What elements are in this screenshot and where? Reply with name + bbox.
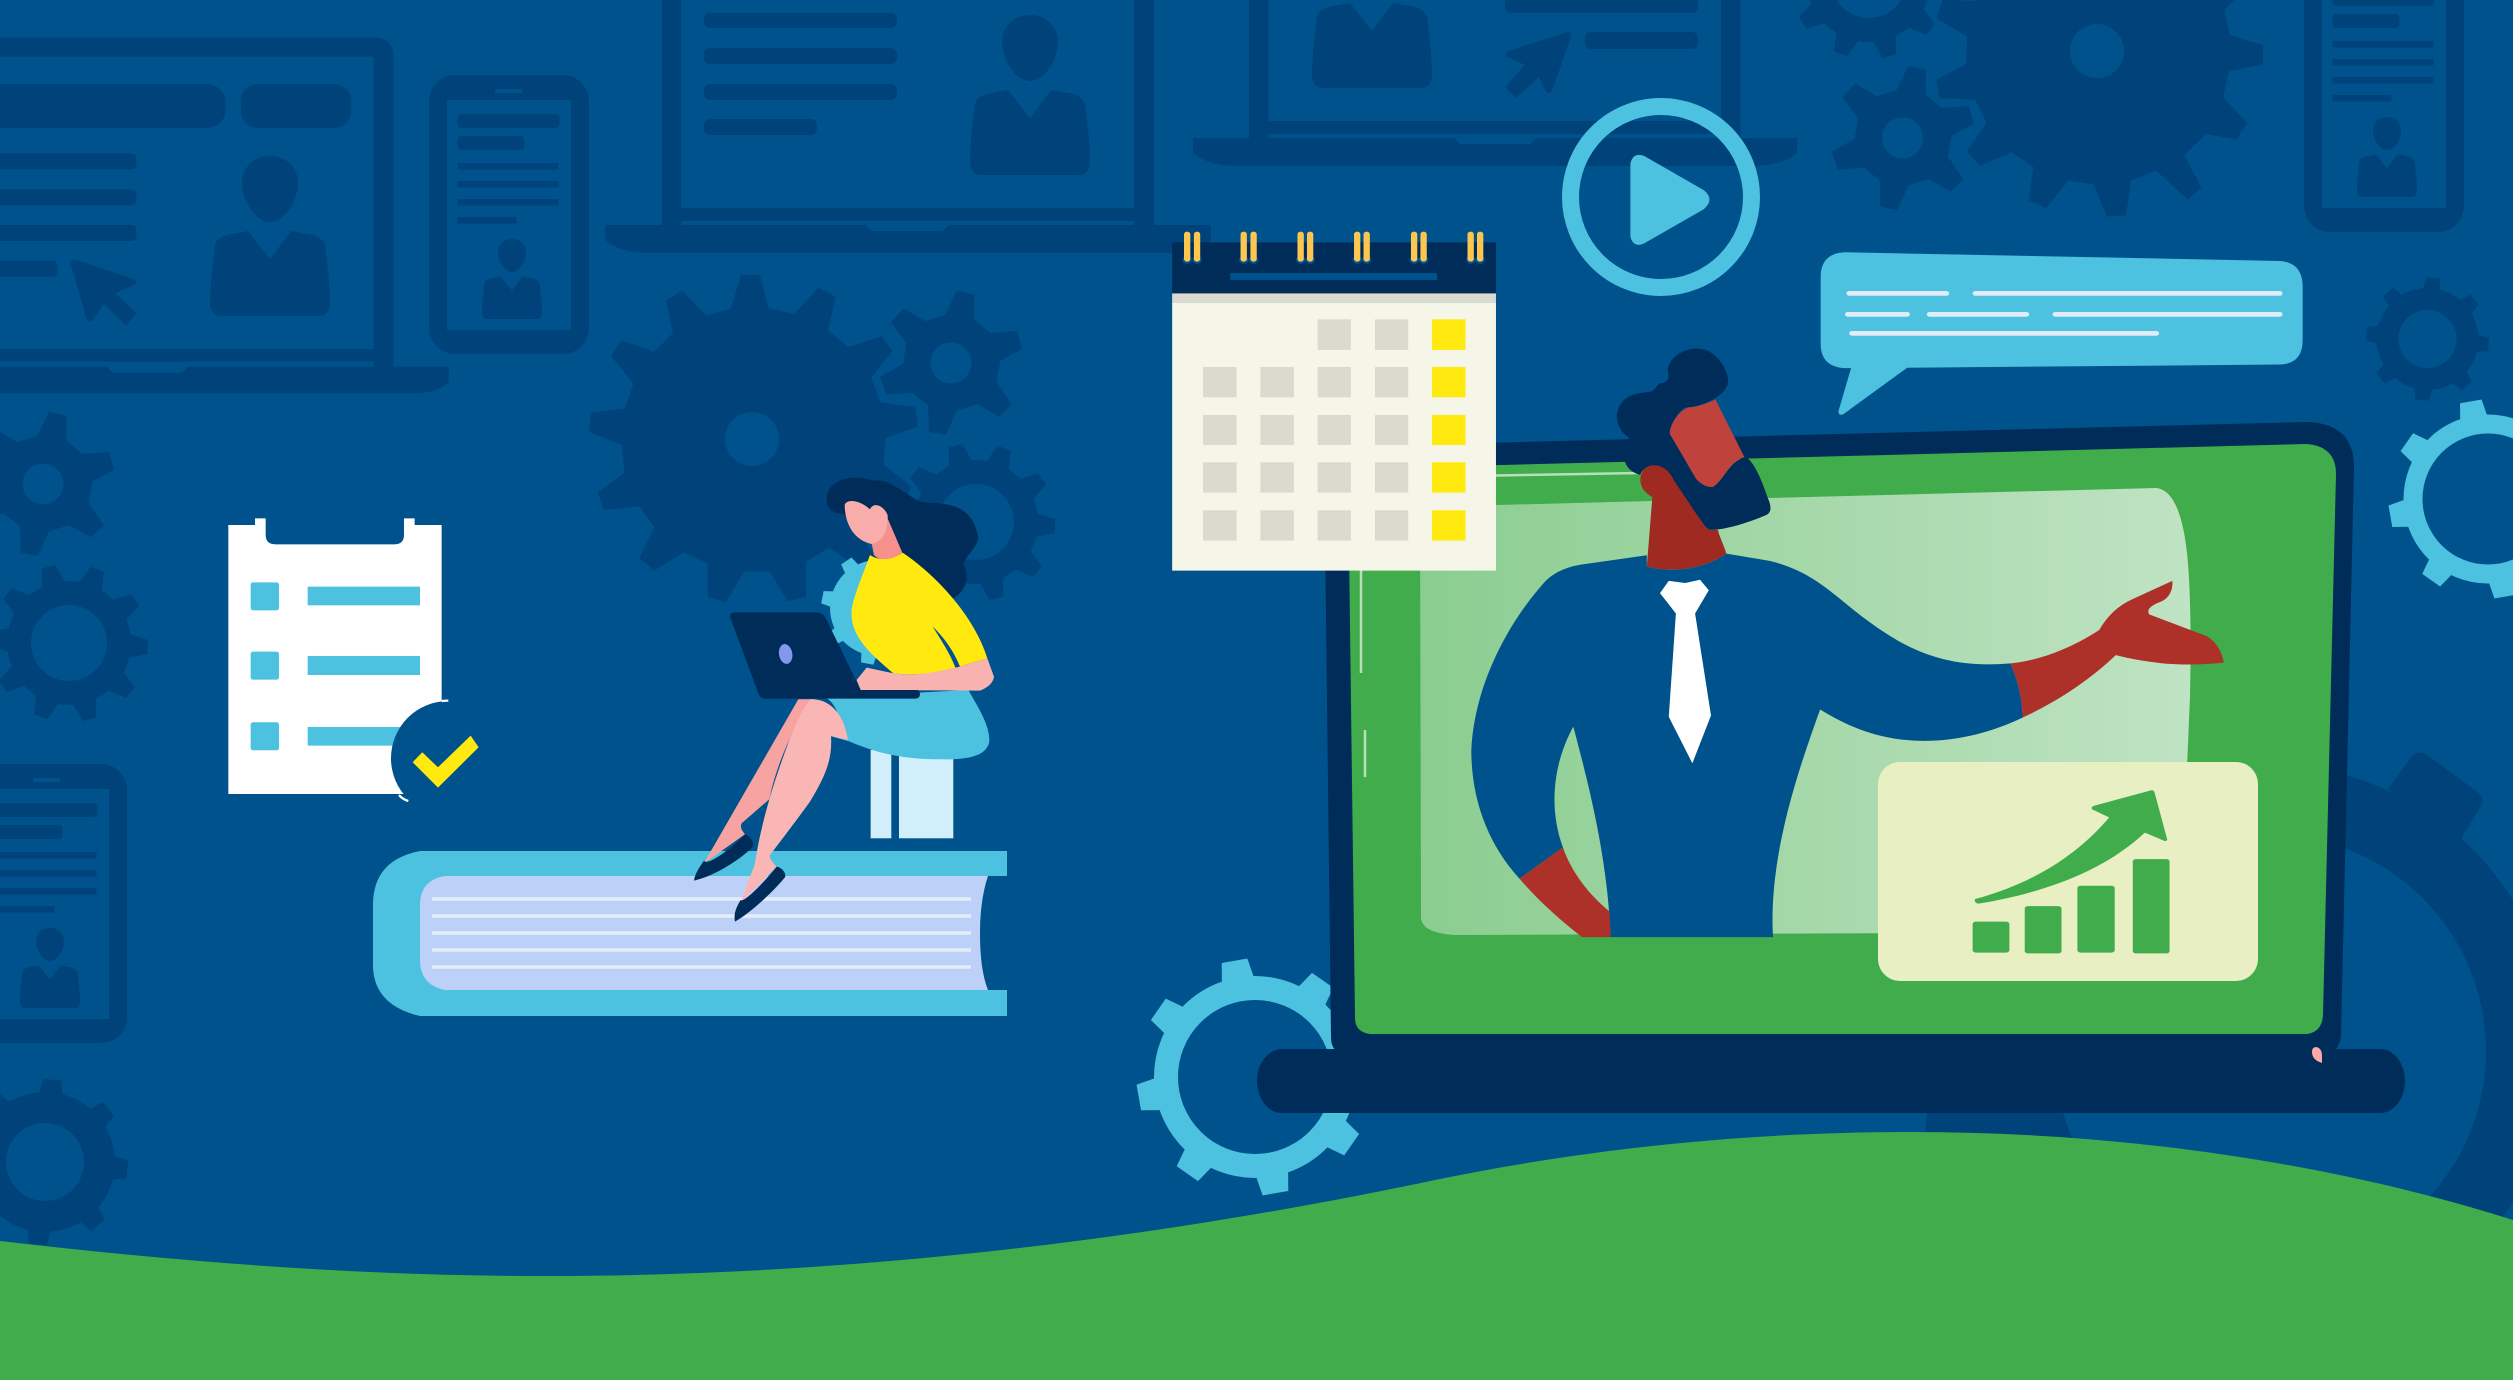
green wave xyxy=(0,1132,2513,1380)
hair xyxy=(827,478,978,598)
back leg xyxy=(700,699,813,870)
clipboard with check xyxy=(228,518,506,816)
background: laptop centre xyxy=(606,0,1211,253)
calendar highlighted cells xyxy=(1432,319,1466,541)
shoes xyxy=(735,867,785,922)
neck xyxy=(1640,465,1726,570)
neck xyxy=(872,518,902,560)
large laptop xyxy=(1257,422,2405,1113)
hair xyxy=(1617,349,1770,530)
background: phone right xyxy=(2304,0,2464,232)
front leg xyxy=(742,699,848,902)
laptop base xyxy=(1257,1049,2405,1113)
calendar day cells xyxy=(1203,319,1408,541)
calendar rings xyxy=(1182,232,1485,264)
background: phone left top xyxy=(429,75,589,354)
chart card xyxy=(1878,762,2258,981)
background: large gear behind laptop xyxy=(1924,752,2513,1302)
left arm xyxy=(1520,847,1611,937)
laptop xyxy=(730,612,920,699)
face xyxy=(845,501,888,544)
calendar xyxy=(1172,232,1496,571)
message lines xyxy=(1848,293,2280,333)
calendar header xyxy=(1172,242,1496,293)
shirt xyxy=(852,553,987,674)
background: laptop left xyxy=(0,38,449,393)
laptop dot xyxy=(777,643,794,665)
laptop frame xyxy=(1324,422,2354,1052)
check mark xyxy=(413,736,479,788)
arm xyxy=(857,658,994,691)
speech bubble xyxy=(1821,252,2303,415)
woman with laptop xyxy=(694,478,994,922)
tie xyxy=(1660,580,1711,763)
laptop screen xyxy=(1348,444,2336,1034)
icon: cyan gear lower left of laptop xyxy=(1118,940,1392,1214)
icon: cyan gear right xyxy=(2373,384,2513,614)
growth arrow xyxy=(1975,790,2167,904)
book pages xyxy=(420,876,988,990)
check badge xyxy=(391,701,506,816)
icon: cyan gear behind woman xyxy=(812,542,944,674)
presenter xyxy=(1471,349,2224,937)
right arm and hand xyxy=(2010,581,2224,718)
background: laptop right xyxy=(1193,0,1797,166)
light panel xyxy=(1420,488,2191,935)
stool xyxy=(871,750,953,838)
play button xyxy=(1570,106,1752,288)
power led xyxy=(2312,1047,2322,1063)
growth chart xyxy=(1973,790,2170,953)
skirt xyxy=(807,690,989,759)
background: phone left bottom xyxy=(0,764,127,1043)
play triangle xyxy=(1630,155,1709,245)
body xyxy=(1471,554,2023,937)
face xyxy=(1670,399,1744,487)
book xyxy=(373,851,1010,1016)
